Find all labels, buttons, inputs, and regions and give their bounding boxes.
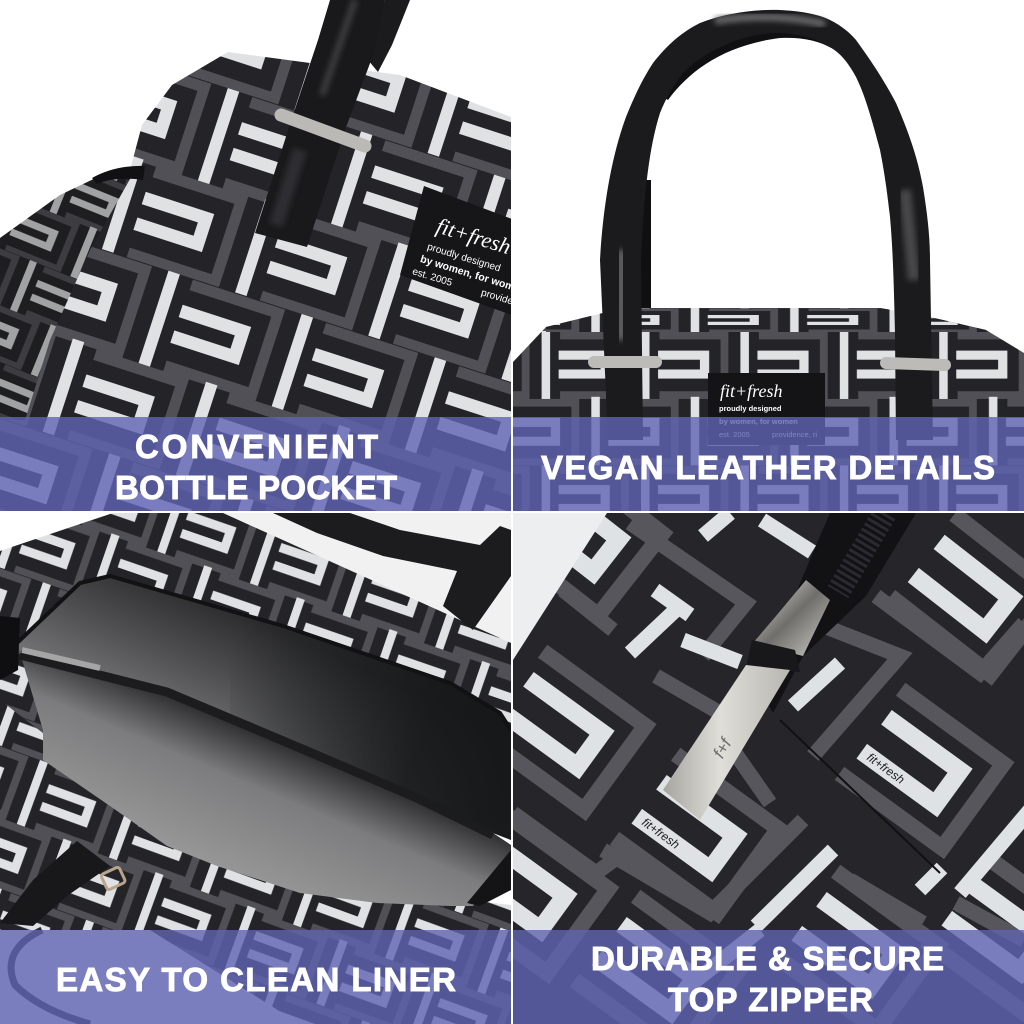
pocket elastic [92, 166, 145, 184]
caption: BOTTLE POCKET [115, 469, 397, 506]
white maze bars [630, 513, 1024, 985]
dark right strap [467, 850, 511, 906]
buckle [101, 867, 126, 890]
handle [273, 513, 511, 630]
front leather handle [600, 10, 933, 440]
zipper tape [760, 513, 916, 713]
brand label: proudly designed [426, 242, 502, 274]
zipper pull: f+f [709, 733, 737, 762]
banner [513, 930, 1024, 1024]
banner [513, 417, 1024, 511]
gray maze bands [513, 523, 1024, 940]
bag body with maze pattern [0, 52, 511, 511]
brand label: by women, for women [419, 253, 528, 297]
zipper coil [838, 513, 885, 592]
upper liner wall [17, 576, 511, 840]
panel: easy to clean liner [0, 513, 511, 1024]
white background corner [513, 513, 607, 660]
banner [0, 417, 511, 511]
printed logos: fit+fresh [864, 750, 908, 787]
caption: CONVENIENT [135, 428, 378, 465]
caption: TOP ZIPPER [668, 981, 873, 1018]
banner [0, 930, 511, 1024]
flap seam [780, 720, 940, 873]
brand label [708, 373, 825, 445]
gray maze brackets [440, 449, 1024, 1024]
liner seam [20, 655, 493, 835]
side bottle pocket [0, 170, 135, 420]
dark side bag edge [0, 616, 20, 680]
brand label: providence [480, 287, 530, 312]
brand label: fit+fresh [720, 381, 782, 401]
brand label: fit+fresh [434, 213, 514, 259]
upper bag fabric [0, 513, 511, 733]
brand label: est. 2005 [411, 266, 454, 289]
panel: convenient bottle pocket [0, 0, 547, 511]
zipper edge [17, 576, 511, 730]
caption: EASY TO CLEAN LINER [56, 961, 456, 998]
white backdrop top left [0, 513, 113, 551]
panel: durable and secure top zipper [513, 513, 1024, 1024]
printed logos: fit+fresh [639, 815, 683, 852]
leather tab [0, 841, 110, 926]
zipper pull [663, 640, 800, 820]
zipper slider [753, 580, 830, 656]
panel: vegan leather details [513, 10, 1024, 511]
right side shade [233, 642, 511, 840]
brand label: proudly designed [719, 404, 782, 413]
seam highlight [22, 650, 100, 668]
brand label: by women, for women [719, 417, 798, 426]
caption: VEGAN LEATHER DETAILS [541, 449, 995, 486]
brand label: providence, ri [772, 430, 817, 439]
brand label: est. 2005 [719, 430, 750, 439]
caption: DURABLE & SECURE [591, 940, 944, 977]
leather handle [255, 0, 410, 247]
bag body [513, 308, 1024, 511]
liner interior [17, 576, 511, 906]
caption [591, 940, 944, 1018]
lower liner floor [20, 653, 511, 906]
rear handle strand [641, 33, 836, 308]
metal strap bar [281, 115, 365, 146]
printed logos [639, 750, 908, 852]
white backdrop behind handle [223, 513, 511, 643]
bag base edge under banner [11, 930, 90, 1024]
caption [116, 434, 398, 500]
pale surface below bag [0, 930, 300, 1024]
lower bag fabric [0, 700, 511, 1024]
metal bars [594, 362, 945, 365]
white maze brackets [461, 476, 1024, 1024]
brand label [400, 186, 511, 314]
fabric base [513, 513, 1024, 1024]
